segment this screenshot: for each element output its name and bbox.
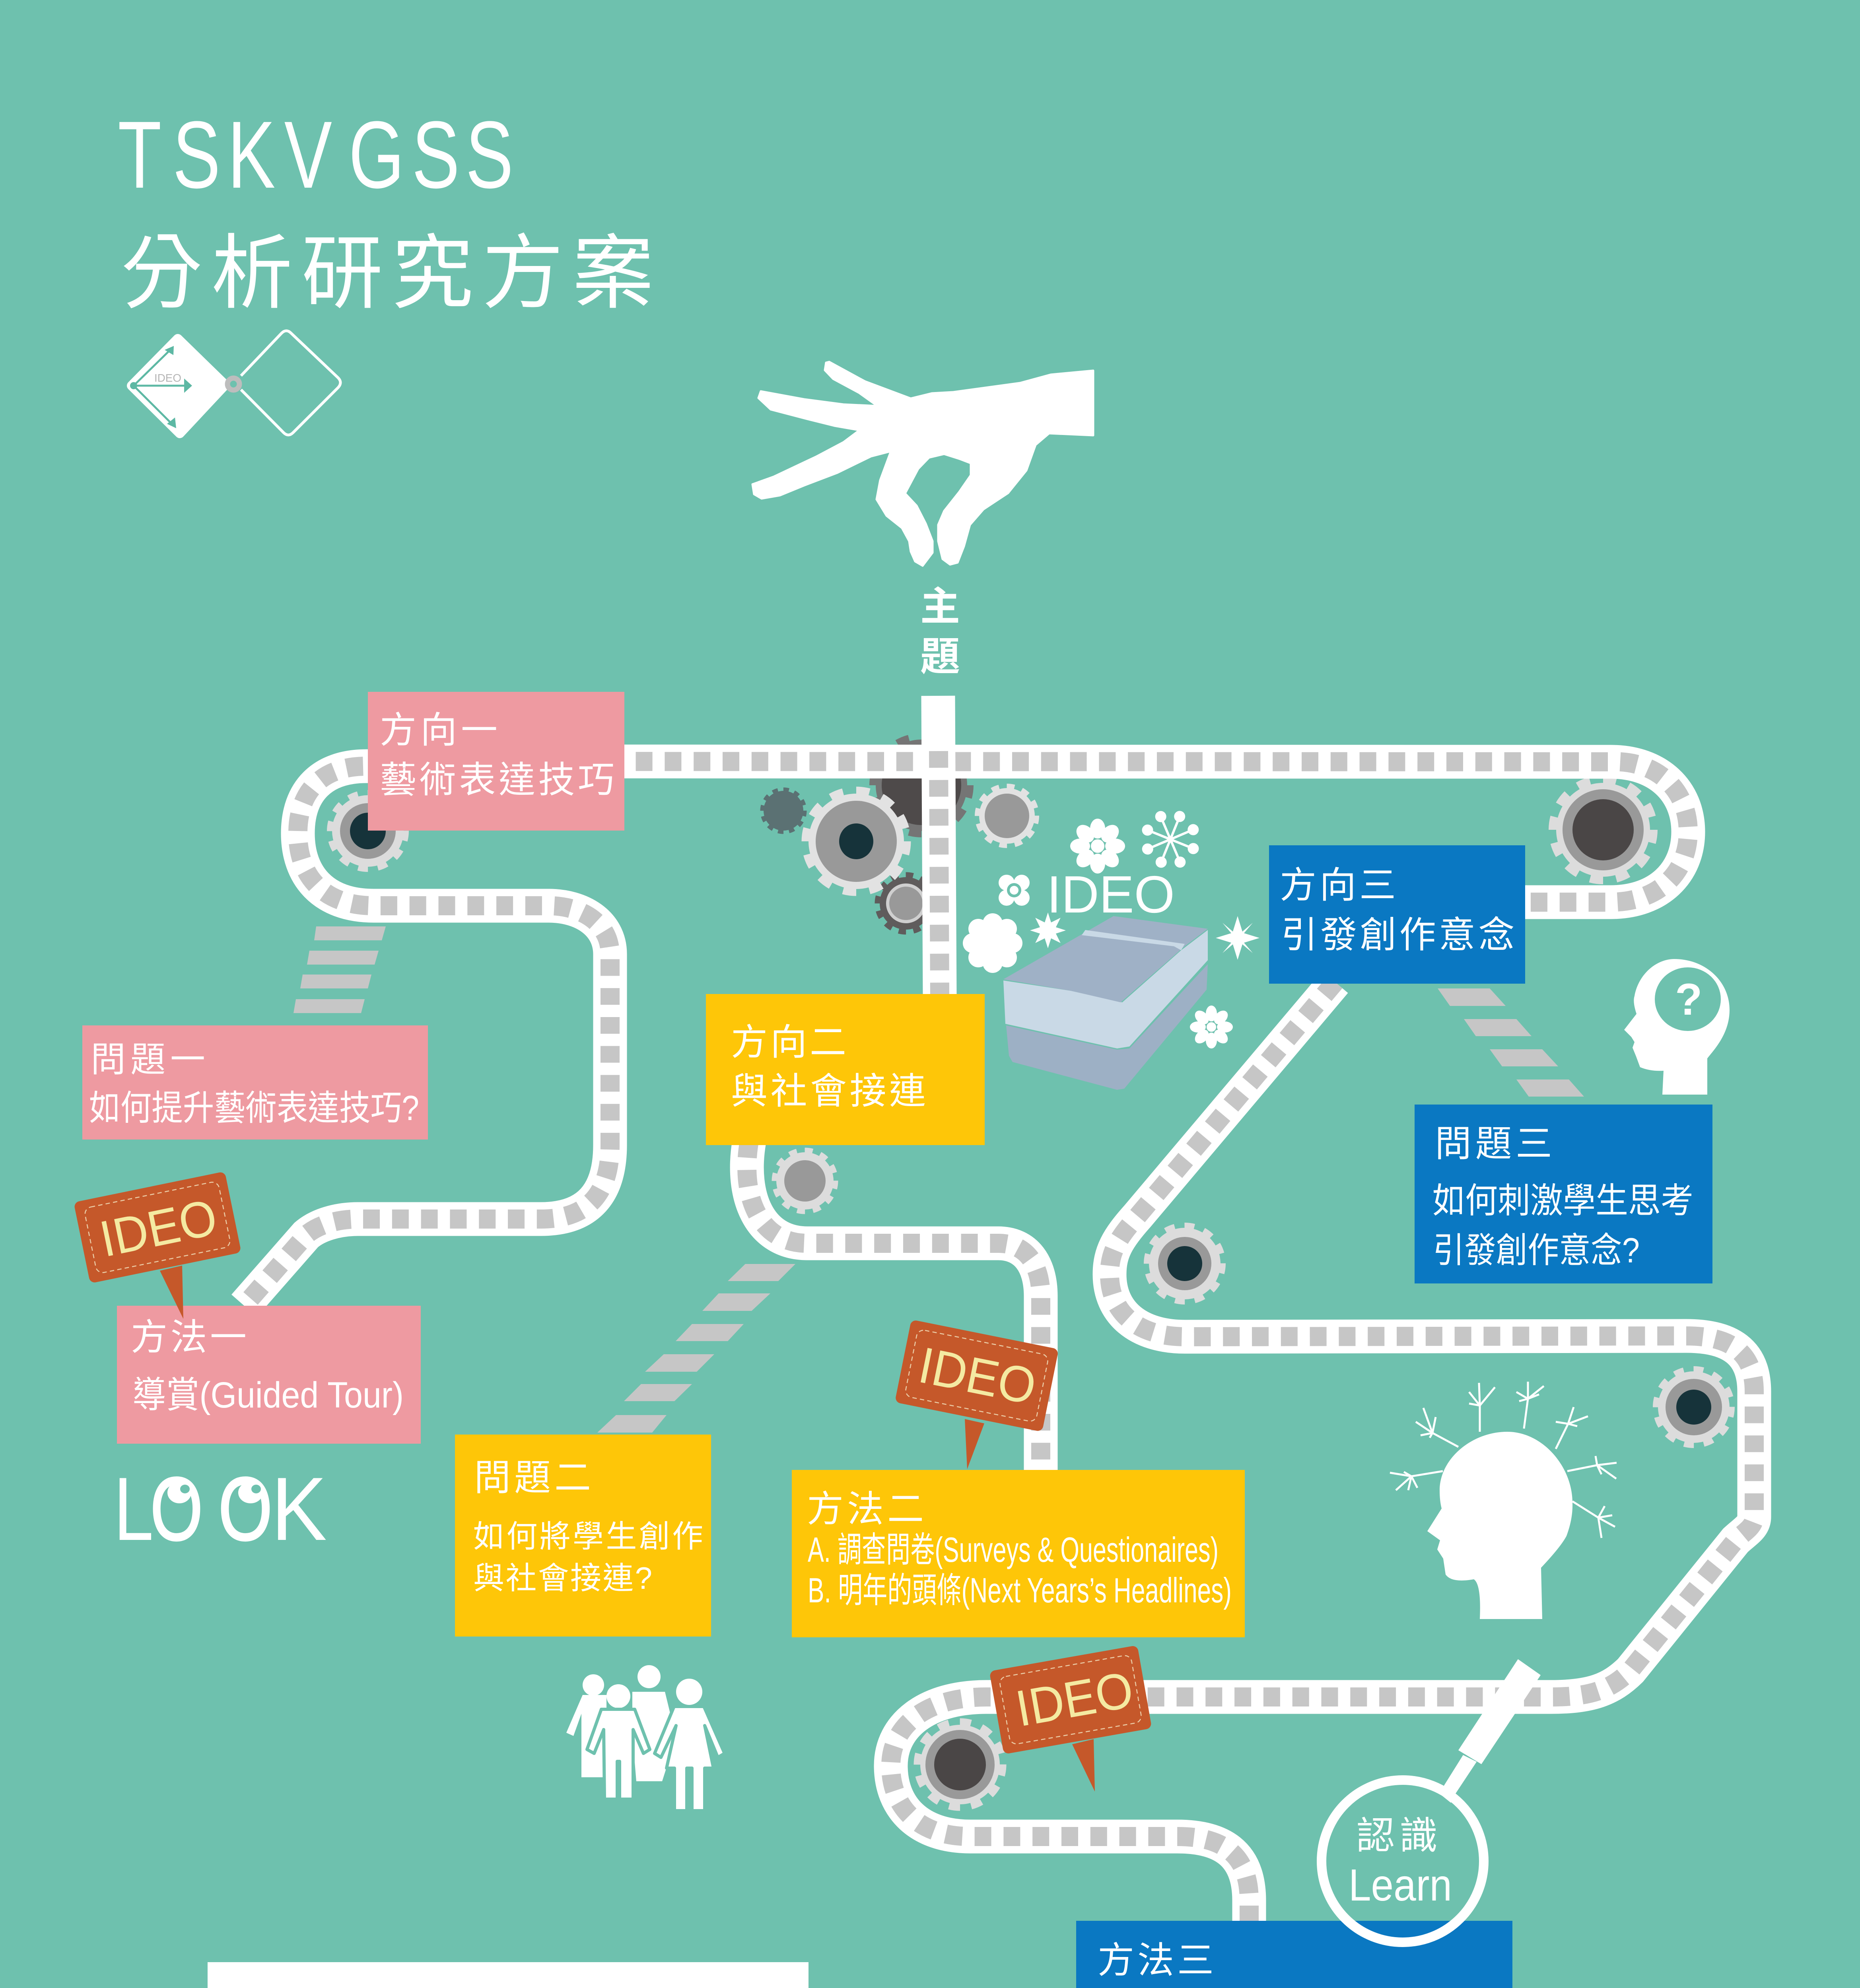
conveyor belt: direction two	[747, 1141, 1041, 1471]
dashes: question two link	[597, 1264, 795, 1433]
heading: method two: 方法二	[807, 1489, 924, 1530]
heading: topic label: 題	[920, 635, 960, 679]
dashes: question one link	[293, 926, 386, 1013]
icon: LOOK eyes wordmark: O	[150, 1458, 203, 1559]
icon: IDEO book box	[1003, 916, 1208, 1090]
heading: method one: 方法一	[131, 1317, 247, 1358]
title	[118, 101, 654, 319]
icon: star F	[1216, 916, 1259, 960]
text: method one body: 導賞(Guided Tour)	[132, 1375, 404, 1415]
label: IDEO: IDEO	[1047, 865, 1175, 924]
conveyor belt: direction three	[891, 982, 1754, 1922]
icon: flower A	[1070, 819, 1125, 874]
icon: group of people	[566, 1665, 725, 1811]
heading: question three: 問題三	[1435, 1124, 1552, 1164]
heading: direction three: 方向三	[1280, 865, 1396, 906]
panel: question one	[82, 1025, 428, 1140]
icon: flower C	[999, 875, 1030, 906]
callout: IDEO bubble one: IDEO	[95, 1188, 222, 1268]
conveyor belt: direction one	[244, 761, 1688, 1306]
gear: lower left loop	[918, 1723, 1002, 1806]
gear: under direction two	[775, 1151, 835, 1211]
title: 分析研究方案	[121, 228, 654, 319]
gear: far right	[1657, 1370, 1731, 1444]
icon: double diamond logo	[130, 331, 340, 435]
heading: direction one: 方向一	[380, 710, 498, 751]
icon: magnifier	[1322, 1659, 1541, 1942]
label: learn: Learn	[1349, 1860, 1452, 1910]
icon: LOOK eyes wordmark: O	[218, 1458, 272, 1559]
callout: IDEO bubble three: IDEO	[1012, 1661, 1137, 1738]
panel: question three	[1415, 1105, 1712, 1283]
icon: LOOK eyes wordmark	[114, 1458, 327, 1559]
callout: IDEO bubble two	[895, 1320, 1059, 1469]
text: question one body: 如何提升藝術表達技巧?	[89, 1088, 419, 1128]
gear: top left	[331, 794, 405, 868]
heading: topic label: 主	[920, 584, 960, 629]
heading: question one: 問題一	[91, 1040, 205, 1079]
icon: LOOK eyes wordmark: K	[271, 1458, 327, 1559]
text: method two item A: A. 調查問卷(Surveys & Questionaires)	[808, 1530, 1219, 1569]
panel: direction three	[1269, 845, 1525, 984]
icon: head with question mark	[1624, 959, 1730, 1095]
conveyor belt: topic stem	[938, 696, 940, 996]
heading: method three: 方法三	[1098, 1940, 1214, 1981]
panel: method three A	[1076, 1921, 1512, 1988]
panel: method one	[117, 1306, 421, 1444]
text: question two body: 如何將學生創作	[473, 1519, 703, 1554]
icon: LOOK eyes wordmark: L	[114, 1458, 154, 1559]
text: method two item B: B. 明年的頭條(Next Years’s Headlines)	[808, 1571, 1232, 1610]
heading: topic label	[920, 584, 960, 679]
panel: question two: 與社會接連?	[473, 1561, 652, 1596]
gears: central cluster	[763, 738, 1036, 931]
panel: direction one	[368, 692, 624, 831]
callout: IDEO bubble one	[74, 1171, 241, 1319]
panel: direction two	[706, 994, 985, 1145]
dashes: question three link	[1438, 988, 1584, 1097]
gear: top right	[1554, 780, 1652, 879]
icon: flower B spokes	[1131, 800, 1210, 879]
panel: reflection	[208, 1962, 809, 1988]
text: direction one topic: 藝術表達技巧	[380, 760, 614, 800]
text: direction two topic: 與社會接連	[731, 1071, 926, 1112]
gear: middle right loop	[1148, 1227, 1222, 1301]
label: learn	[1349, 1815, 1452, 1910]
callout: IDEO bubble two: IDEO	[914, 1337, 1041, 1415]
heading: direction two: 方向二	[731, 1022, 846, 1063]
label: learn: 認識	[1357, 1815, 1438, 1857]
panel: question two	[455, 1435, 711, 1637]
icon: head with neural branches	[1390, 1382, 1617, 1619]
panel: method two	[792, 1470, 1245, 1637]
icon: pinching hand	[752, 362, 1093, 566]
panel: question three: 引發創作意念?	[1433, 1231, 1640, 1270]
callout: IDEO bubble three	[989, 1645, 1152, 1792]
heading: question two: 問題二	[474, 1458, 591, 1498]
icon: star E	[1030, 912, 1066, 948]
text: question three body: 如何刺激學生思考	[1432, 1181, 1693, 1220]
title: TSKVGSS	[118, 101, 513, 208]
icon: head with question mark: ?	[1675, 975, 1702, 1024]
icon: flower G	[1190, 1006, 1233, 1048]
text: direction three topic: 引發創作意念	[1281, 915, 1515, 955]
icon: flower D scallop	[963, 913, 1022, 973]
icon: double diamond logo: IDEO	[154, 372, 181, 384]
